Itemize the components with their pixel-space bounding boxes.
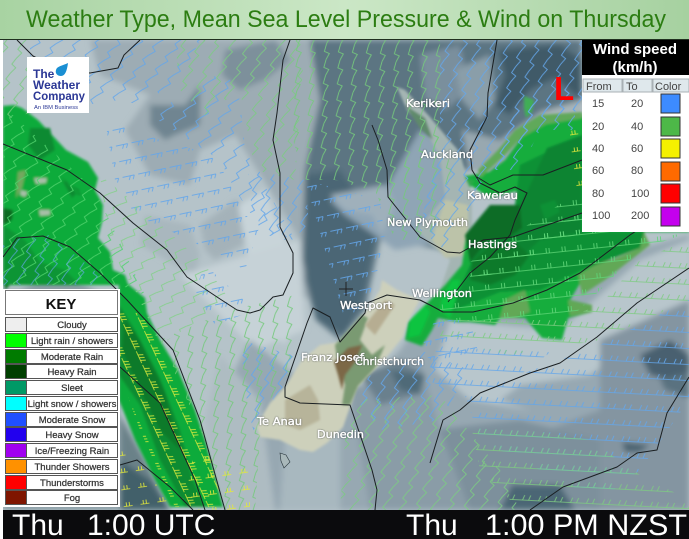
panel: wind speed legend: 40 [631,121,643,133]
city labels: Te Anau [256,415,302,428]
panel: weather type key: Ice/Freezing Rain [35,446,109,457]
title bar [0,0,689,40]
panel: weather type key: Heavy Rain [47,367,97,378]
panel: wind speed legend: 15 [592,98,604,110]
panel: wind speed legend: 200 [631,210,649,222]
panel: wind speed legend: 100 [631,188,649,200]
city labels: Christchurch [355,355,424,368]
city labels: Wellington [412,287,472,300]
panel: weather type key: Thunderstorms [40,478,104,489]
panel: wind speed legend: 20 [592,121,604,133]
crosshair [339,282,353,296]
panel: wind speed legend: 80 [592,188,604,200]
panel: wind speed legend: 40 [592,143,604,155]
panel: wind speed legend: (km/h) [612,59,658,76]
land: South Island [257,280,420,468]
panel: weather type key: Light snow / showers [28,399,117,410]
panel: wind speed legend: Wind speed [593,41,677,58]
panel: weather type key: Thunder Showers [35,462,110,473]
city labels: Westport [340,299,393,312]
panel: weather type key: Moderate Snow [39,415,105,426]
city labels: Hastings [468,238,517,251]
bottom time bar [3,509,689,539]
logo: The Weather Company: Company [33,89,85,103]
city labels: Dunedin [317,428,364,441]
panel: wind speed legend: 60 [631,143,643,155]
title bar: Weather Type, Mean Sea Level Pressure & Wind on Thursday [26,6,666,33]
land: North Island [397,87,472,300]
logo: The Weather Company: Weather [33,78,80,92]
city labels: Franz Josef [301,351,365,364]
panel: weather type key: Moderate Rain [41,352,103,363]
panel: weather type key: Fog [64,493,80,504]
panel: weather type key: Light rain / showers [31,336,113,347]
city labels [256,97,518,441]
panel: weather type key [3,289,120,507]
panel: wind speed legend: 20 [631,98,643,110]
low pressure centre: L [554,70,574,107]
panel: wind speed legend: 60 [592,165,604,177]
city labels: Kerikeri [406,97,450,110]
rain band: west [3,105,223,507]
panel: weather type key: Cloudy [57,320,87,331]
logo: The Weather Company: The [33,67,55,81]
city labels: New Plymouth [387,216,468,229]
city labels: Kawerau [467,189,518,202]
panel: wind speed legend: Color [655,81,682,93]
panel: weather type key: KEY [46,296,76,313]
logo: The Weather Company: An IBM Business [34,105,78,111]
panel: weather type key: Sleet [61,383,83,394]
city labels: Auckland [421,148,473,161]
panel: weather type key: Heavy Snow [45,430,99,441]
panel: wind speed legend: To [626,81,638,93]
rain band: east [405,96,689,346]
panel: wind speed legend [582,40,689,232]
panel: wind speed legend: 100 [592,210,610,222]
panel: wind speed legend: From [586,81,612,93]
logo: The Weather Company [27,57,89,113]
panel: wind speed legend: 80 [631,165,643,177]
